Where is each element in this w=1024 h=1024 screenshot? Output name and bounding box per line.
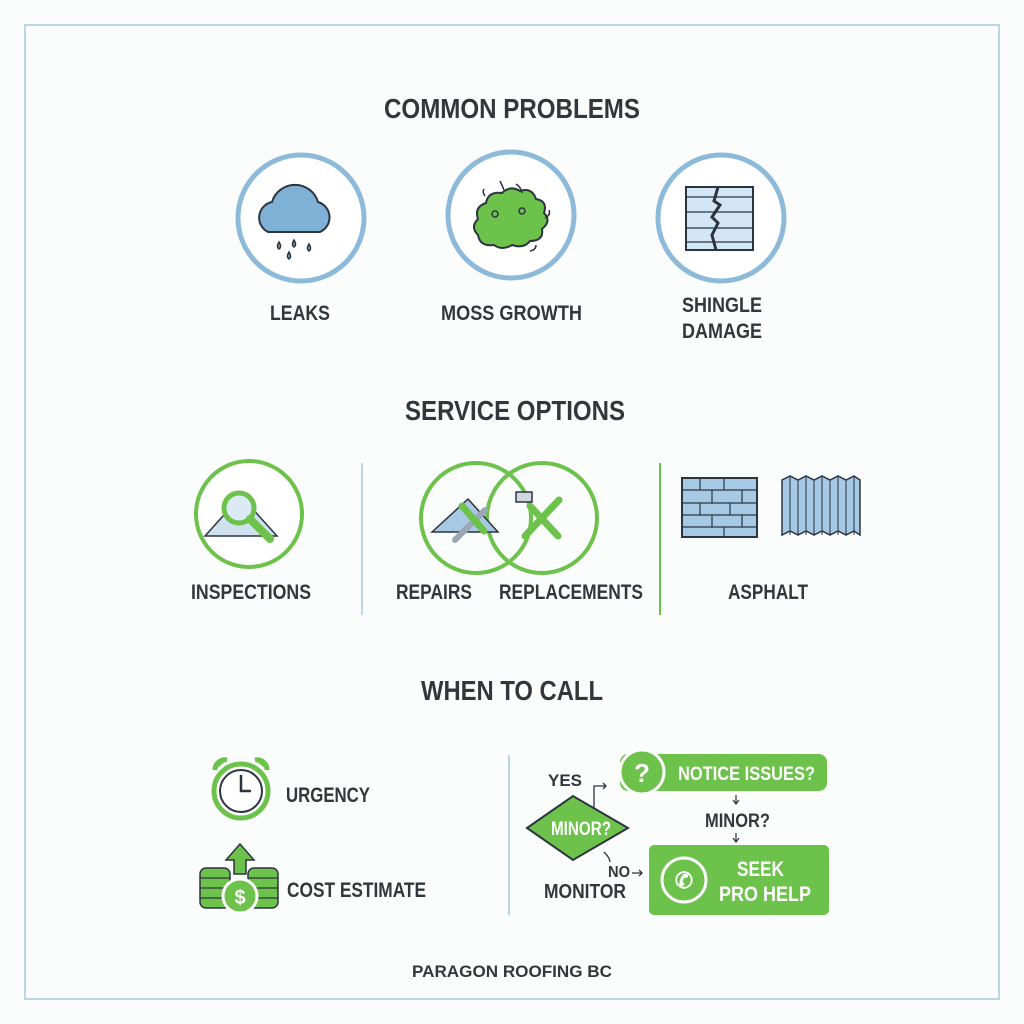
node: notice issues: ? [634, 758, 650, 788]
footer: PARAGON ROOFING BC [412, 962, 612, 981]
icon: leaks [238, 155, 364, 281]
arrow: down [733, 795, 739, 804]
node: notice issues: NOTICE ISSUES? [678, 764, 815, 785]
divider [361, 463, 363, 615]
label: shingle damage [682, 294, 762, 343]
arrow: down 2 [733, 833, 739, 842]
heading: when to call: WHEN TO CALL [421, 675, 603, 706]
label: shingle damage: DAMAGE [682, 320, 762, 343]
icon: shingle damage [658, 155, 784, 281]
node: seek pro help [649, 845, 829, 915]
node: minor diamond [527, 796, 628, 860]
divider [659, 463, 661, 615]
label: asphalt: ASPHALT [728, 581, 808, 604]
node: seek pro help: PRO HELP [719, 883, 811, 906]
label: no: NO [608, 864, 630, 881]
node: notice issues [620, 750, 827, 794]
icon: brick tiles [682, 478, 757, 537]
label: repairs: REPAIRS [396, 581, 472, 604]
label: replacements: REPLACEMENTS [499, 581, 643, 604]
label: leaks: LEAKS [270, 302, 330, 325]
icon: cost estimate [200, 844, 278, 913]
icon: moss growth [448, 152, 574, 278]
node: seek pro help: SEEK [737, 858, 784, 881]
heading: service options: SERVICE OPTIONS [405, 395, 625, 426]
flowchart [527, 750, 829, 915]
icon: corrugated sheet [782, 476, 860, 535]
icon: inspections [196, 461, 302, 567]
icon: repairs and replacements [421, 463, 597, 573]
icon: clock [214, 760, 268, 818]
label: yes: YES [548, 771, 582, 790]
label: shingle damage: SHINGLE [682, 294, 762, 317]
label: monitor: MONITOR [544, 881, 626, 903]
label: inspections: INSPECTIONS [191, 581, 311, 604]
label: moss growth: MOSS GROWTH [441, 302, 582, 325]
divider [508, 755, 510, 915]
label: urgency: URGENCY [286, 784, 370, 807]
node: seek pro help: ✆ [675, 868, 693, 893]
icon: cost estimate: $ [234, 887, 246, 909]
node: minor diamond: MINOR? [551, 819, 611, 840]
label: cost estimate: COST ESTIMATE [287, 879, 426, 902]
arrow: yes [594, 783, 606, 810]
heading: common problems: COMMON PROBLEMS [384, 93, 640, 124]
label: minor: MINOR? [705, 811, 770, 832]
